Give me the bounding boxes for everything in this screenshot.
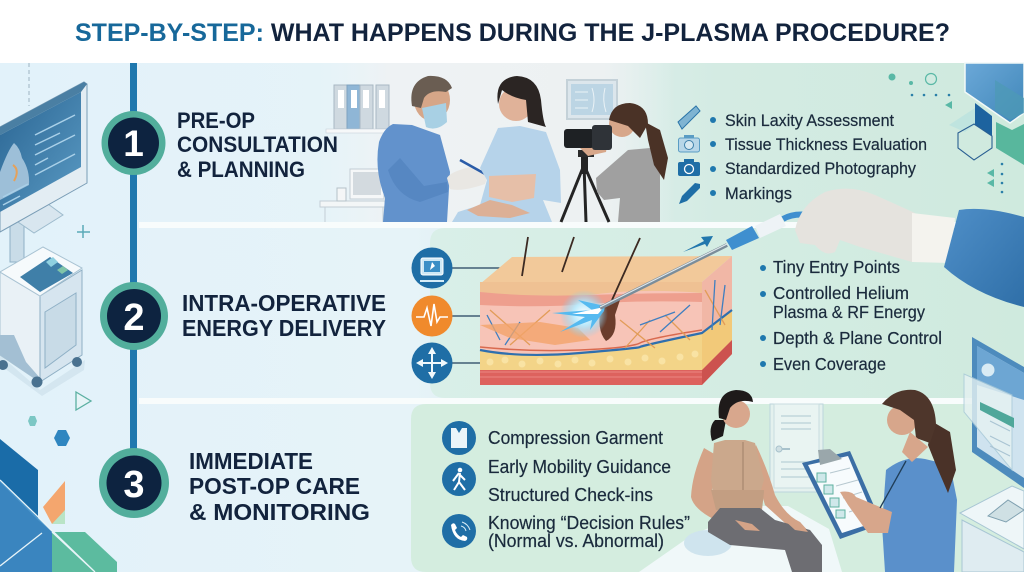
- row divider: step 2 and 3: [139, 398, 1024, 404]
- heading: step 1: & PLANNING: [177, 157, 305, 182]
- illustration: plasma handpiece and gloved hand: [600, 189, 1024, 308]
- icon: ruler: [678, 106, 700, 129]
- heading: step 3: POST-OP CARE: [189, 473, 360, 499]
- row divider: step 1 and 2: [139, 222, 1024, 228]
- illustration: medical record monitor: [964, 337, 1024, 488]
- list: step 2 bullets: Even Coverage: [773, 354, 886, 374]
- list: step 3 items: [488, 428, 690, 551]
- step 2 number badge: [100, 282, 168, 350]
- illustration: patient in gown: [452, 76, 561, 222]
- step 1 number badge: [102, 111, 166, 175]
- timeline connector: [130, 63, 137, 453]
- decorative icon: plus: [77, 225, 90, 238]
- list: step 1 bullets: Markings: [725, 185, 792, 203]
- illustration: clinic door: [770, 404, 823, 492]
- icon: compression garment: [442, 421, 476, 455]
- heading: step 3: IMMEDIATE: [189, 448, 313, 474]
- icons: step 3 list: [442, 421, 476, 548]
- diagram: skin cross-section: [480, 237, 732, 385]
- list: step 3 items: Knowing “Decision Rules”: [488, 513, 690, 533]
- icon: phone: [442, 514, 476, 548]
- illustration: nurse with clipboard: [802, 390, 957, 572]
- list: step 2 bullets: Controlled Helium: [773, 283, 909, 303]
- decorative shapes: top-right geometric cluster: [888, 63, 1024, 193]
- callout lines: [452, 268, 505, 363]
- list: step 3 items: Early Mobility Guidance: [488, 457, 671, 477]
- list: step 2 bullets: Tiny Entry Points: [773, 257, 900, 277]
- icons: step 2 callouts: [412, 248, 505, 384]
- decorative shape: teal hexagon: [28, 416, 37, 426]
- decorative icon: play triangle: [76, 392, 91, 410]
- decorative shape: blue hexagon: [54, 430, 70, 446]
- illustration: photographer with camera: [561, 103, 668, 222]
- heading: step 1: PRE-OP: [177, 108, 255, 133]
- illustration: left monitor: [0, 63, 87, 262]
- step 1 number badge: 1: [123, 123, 144, 164]
- list: step 1 bullets: Standardized Photography: [725, 160, 917, 178]
- list: step 1 bullets: Tissue Thickness Evaluation: [725, 136, 927, 154]
- icon: pen: [679, 183, 700, 204]
- panel: step 2 green backdrop: [430, 228, 1024, 398]
- list: step 1 bullets: Skin Laxity Assessment: [725, 112, 894, 130]
- illustration: clinic desk: [960, 486, 1024, 572]
- list: step 3 items: (Normal vs. Abnormal): [488, 531, 664, 551]
- list: step 1 bullets: [710, 112, 927, 203]
- icon: walking person: [442, 462, 476, 496]
- heading: step 2: INTRA-OPERATIVE: [182, 290, 386, 316]
- heading: step 2: ENERGY DELIVERY: [182, 315, 386, 341]
- icon: outline camera: [678, 135, 700, 152]
- panel: step 3 green backdrop: [411, 404, 1024, 572]
- panel: step 1 room backdrop: [320, 63, 675, 222]
- list: step 3 items: Structured Check-ins: [488, 485, 653, 505]
- icon: energy waveform: [412, 296, 452, 336]
- heading: step 1: [177, 108, 338, 182]
- icon: four-way arrows: [412, 342, 452, 384]
- illustration: seated patient in compression garment: [691, 390, 822, 572]
- step 3 number badge: 3: [123, 464, 145, 506]
- heading: step 3: & MONITORING: [189, 499, 370, 525]
- step 3 number badge: [99, 448, 169, 518]
- list: step 2 bullets: [760, 257, 942, 374]
- list: step 3 items: Compression Garment: [488, 428, 663, 448]
- illustration: treatment table: [639, 506, 842, 572]
- icon: direction arrow: [683, 236, 713, 252]
- icon: device screen: [412, 248, 452, 288]
- illustration: plasma generator machine: [0, 247, 85, 396]
- icon: filled camera: [678, 159, 700, 176]
- heading: step 1: CONSULTATION: [177, 132, 338, 157]
- heading: step 3: [189, 448, 370, 525]
- decorative shapes: bottom-left geometric cluster: [0, 439, 117, 572]
- title: STEP-BY-STEP: WHAT HAPPENS DURING THE J-PLASMA PROCEDURE?: [75, 19, 950, 47]
- heading: step 2: [182, 290, 386, 341]
- illustration: step 1 consultation room: [320, 80, 617, 222]
- step 2 number badge: 2: [123, 297, 145, 339]
- icons: step 1 list: [678, 106, 700, 204]
- illustration: clinician with mask: [377, 76, 488, 222]
- list: step 2 bullets: Depth & Plane Control: [773, 328, 942, 348]
- list: step 2 bullets: Plasma & RF Energy: [773, 302, 925, 322]
